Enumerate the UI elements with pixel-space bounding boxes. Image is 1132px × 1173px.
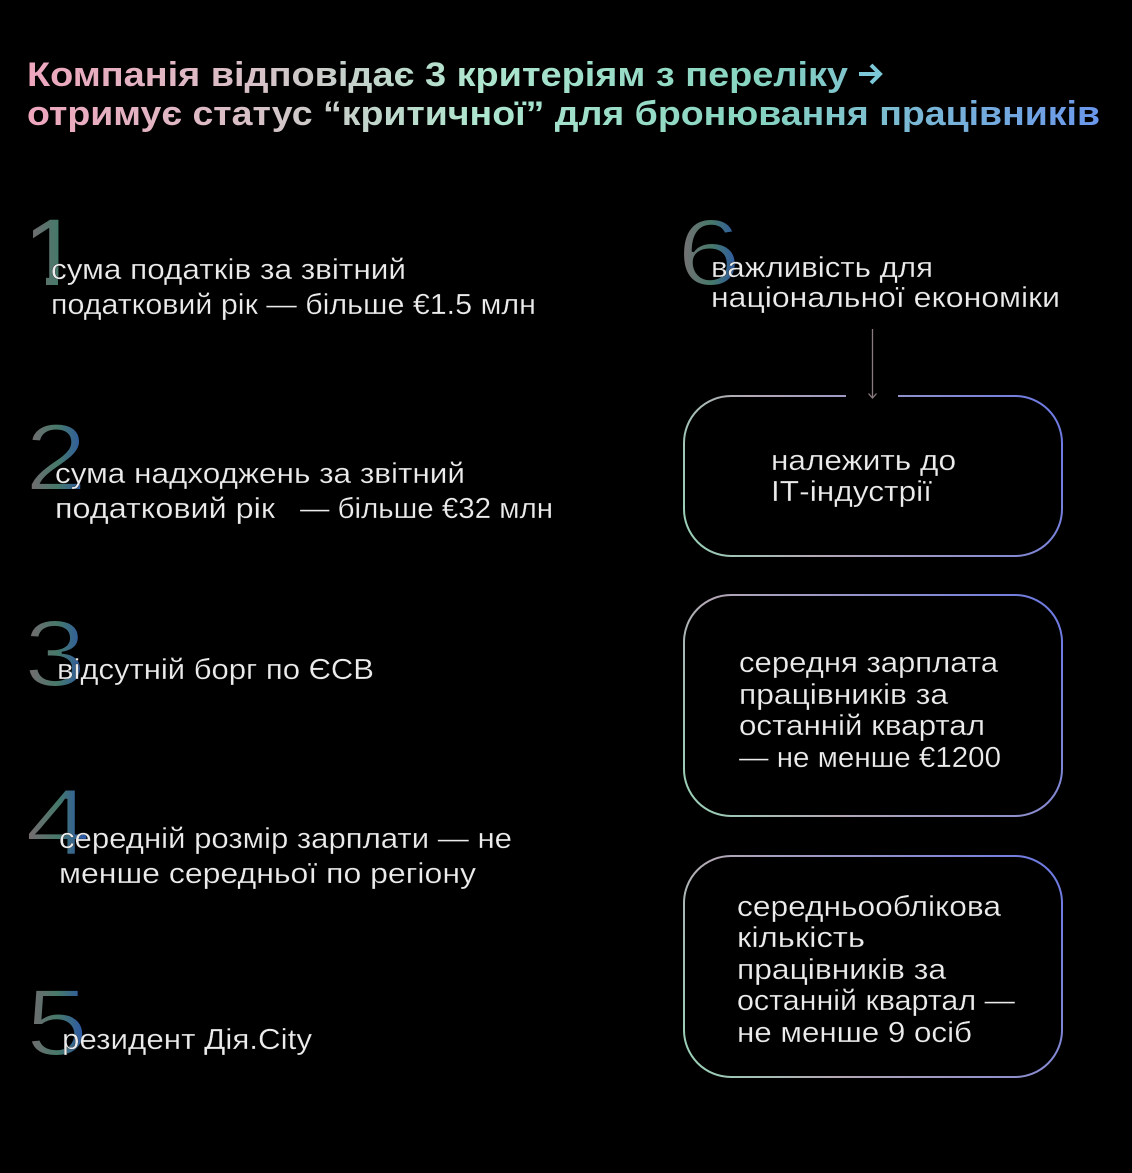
box: headcount: не менше 9 осіб	[737, 1017, 972, 1049]
criterion 2: сума надходжень за звітний	[55, 458, 465, 490]
criterion 6: 6	[677, 200, 741, 306]
criterion 5: резидент Дія.City	[62, 1024, 313, 1056]
box: IT industry: ІТ-індустрії	[771, 476, 932, 508]
criterion 2	[25, 405, 553, 525]
box: average salary: — не менше €1200	[739, 742, 1001, 774]
box: headcount: працівників за	[737, 954, 947, 986]
criterion 5	[26, 970, 313, 1076]
criterion 3: 3	[24, 601, 86, 707]
criterion 6: національної економіки	[711, 282, 1060, 314]
criterion 2: податковий рік	[55, 493, 275, 525]
box: headcount: останній квартал —	[737, 985, 1015, 1017]
box: average salary: середня зарплата	[739, 647, 999, 679]
box: IT industry	[684, 396, 1062, 556]
criterion 6: важливість для	[711, 252, 933, 284]
box: headcount: середньооблікова	[737, 891, 1002, 923]
box: average salary: останній квартал	[739, 710, 985, 742]
criterion 3: відсутній борг по ЄСВ	[57, 654, 374, 686]
arrow	[868, 329, 876, 398]
box: average salary	[684, 595, 1062, 816]
criterion 5: 5	[26, 970, 88, 1076]
criterion 4	[25, 770, 512, 890]
title	[27, 56, 1100, 133]
criterion 1	[33, 220, 534, 320]
box: average salary: працівників за	[739, 679, 949, 711]
title: Компанія відповідає 3 критеріям з переліку	[27, 56, 848, 94]
criterion 4: середній розмір зарплати — не	[59, 823, 512, 855]
title: отримує статус “критичної” для бронювання працівників	[27, 95, 1100, 133]
box: headcount: кількість	[737, 922, 865, 954]
criterion 4: менше середньої по регіону	[59, 858, 477, 890]
criterion 1: сума податків за звітний	[51, 254, 406, 286]
criterion 1: податковий рік — більше €1.5 млн	[51, 289, 536, 321]
criterion 2: 2	[25, 405, 87, 511]
criterion 4: 4	[25, 770, 91, 876]
criterion 1: 1	[23, 200, 81, 306]
box: headcount	[684, 856, 1062, 1077]
criterion 6	[677, 200, 1060, 314]
box: IT industry: належить до	[771, 445, 956, 477]
criterion 2: — більше €32 млн	[300, 493, 553, 525]
criterion 3	[24, 601, 374, 707]
